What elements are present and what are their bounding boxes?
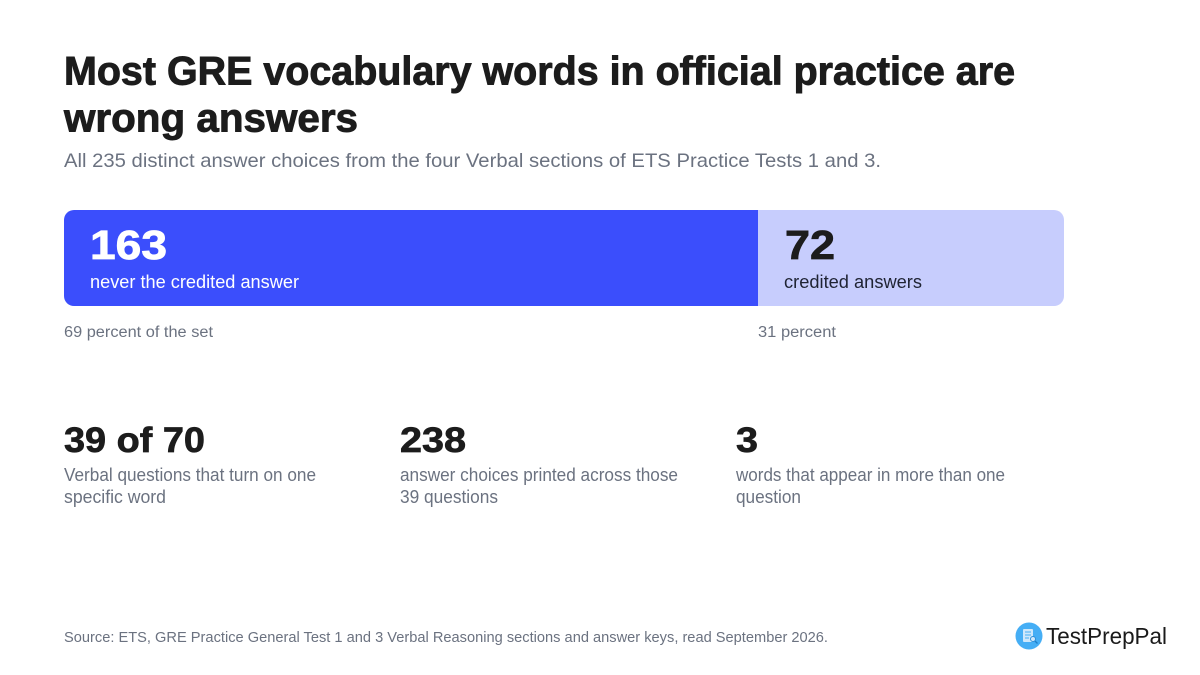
title [63, 50, 1015, 140]
icon: document with magnifier [1016, 622, 1042, 650]
stat: 39 of 70: Verbal questions that turn on one [64, 465, 316, 485]
stat: 3: 3 [736, 420, 758, 460]
percent label: 69 percent: 69 percent of the set [64, 324, 214, 341]
bar segment: credited answers [740, 210, 1064, 306]
value: 163: 163 [90, 222, 167, 268]
title: wrong answers [63, 96, 358, 140]
proportion bar [64, 210, 1064, 306]
bar segment: never credited [64, 210, 758, 306]
stat: 3 [735, 420, 1005, 507]
source note: Source: ETS, GRE Practice General Test 1 and 3 Verbal Reasoning sections and answer keys, read September 2026. [64, 630, 828, 646]
stat: 39 of 70: specific word [64, 487, 166, 507]
value: 72: 72 [785, 222, 835, 268]
stat: 39 of 70: 39 of 70 [64, 420, 205, 460]
subtitle: All 235 distinct answer choices from the four Verbal sections of ETS Practice Tests 1 and 3. [64, 150, 881, 172]
stat: 3: words that appear in more than one [735, 465, 1005, 485]
stat: 238 [400, 420, 678, 507]
wordmark: TestPrepPal [1046, 623, 1167, 649]
logo: TestPrepPal [1016, 622, 1167, 650]
stat: 238: answer choices printed across those [400, 465, 678, 485]
stat: 3: question [736, 487, 801, 507]
label: credited answers: credited answers [784, 272, 922, 292]
stat: 238: 39 questions [400, 487, 498, 507]
stat: 238: 238 [400, 420, 466, 460]
percent label: 31 percent: 31 percent [758, 324, 837, 341]
stat: 39 of 70 [64, 420, 316, 507]
title: Most GRE vocabulary words in official practice are [64, 50, 1015, 94]
label: never the credited answer: never the credited answer [90, 272, 299, 292]
